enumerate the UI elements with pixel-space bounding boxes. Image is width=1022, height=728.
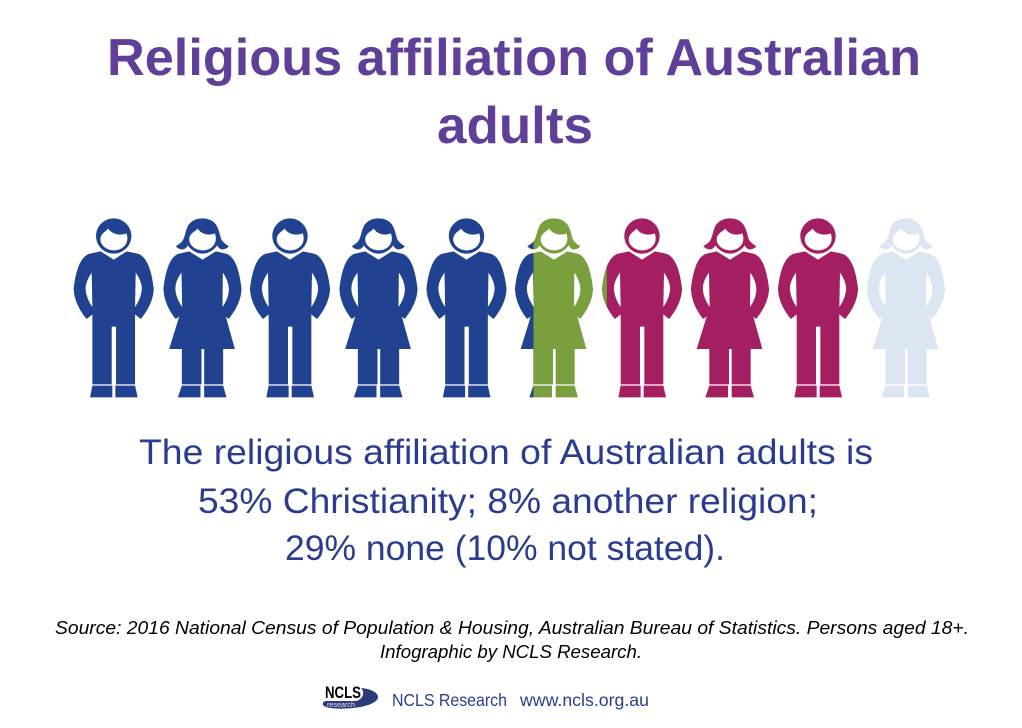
title: Religious affiliation of Australian	[107, 29, 921, 87]
figure 8: none, woman	[691, 218, 769, 397]
source note: Source: 2016 National Census of Population & Housing, Australian Bureau of Statistics. Persons aged 18+.	[55, 618, 969, 638]
figure 5: Christianity, man	[427, 218, 506, 397]
figure 4: Christianity, woman	[340, 218, 417, 397]
title	[107, 29, 921, 155]
logo: NCLS research: research	[327, 702, 355, 709]
footer organisation and website: www.ncls.org.au	[519, 690, 649, 710]
figure 3: Christianity, man	[250, 218, 330, 397]
figure 6: split Christianity and another religion, woman	[515, 218, 593, 397]
footer organisation and website	[392, 690, 649, 710]
source note: Infographic by NCLS Research.	[380, 642, 642, 662]
logo: NCLS research: NCLS	[325, 683, 361, 702]
logo: NCLS research	[323, 683, 378, 709]
figure 9: none, man	[778, 218, 858, 397]
summary text: The religious affiliation of Australian adults is	[139, 433, 873, 472]
title: adults	[437, 97, 593, 155]
summary text: 29% none (10% not stated).	[285, 529, 725, 568]
figure 10: not stated, woman	[867, 218, 945, 397]
pictogram: ten adult figures	[74, 218, 945, 397]
figure 2: Christianity, woman	[164, 218, 241, 397]
footer organisation and website: NCLS Research	[392, 690, 507, 710]
summary text	[139, 433, 873, 568]
summary text: 53% Christianity; 8% another religion;	[198, 482, 818, 521]
source note	[55, 618, 969, 662]
figure 1: Christianity, man	[74, 218, 154, 397]
figure 7: none, man with sliver of another religion	[602, 218, 682, 397]
